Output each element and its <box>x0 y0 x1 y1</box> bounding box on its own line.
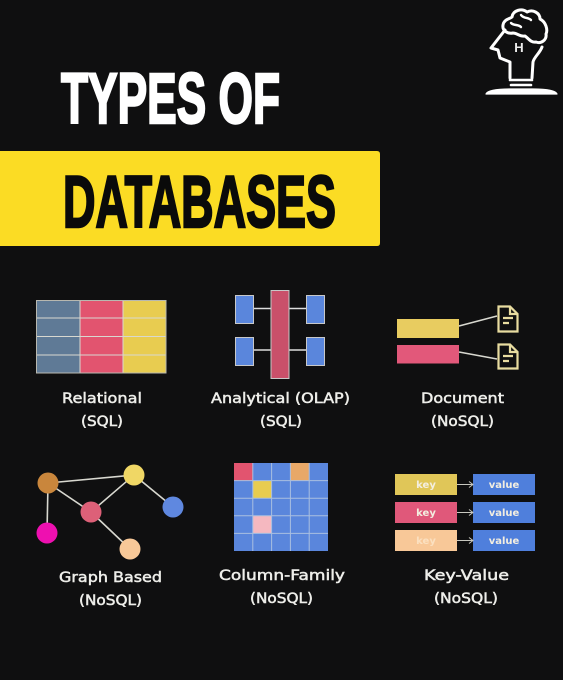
logo: brain lightbulb head <box>486 10 557 94</box>
panel: document <box>397 306 518 430</box>
label: Analytical (OLAP) (SQL): Analytical (OLAP) <box>211 391 350 407</box>
label: Analytical (OLAP) (SQL) <box>211 391 350 430</box>
yellow banner with DATABASES <box>0 151 380 246</box>
label: Graph Based (NoSQL): (NoSQL) <box>79 593 142 609</box>
label: Document (NoSQL) <box>421 391 504 430</box>
panel: key-value <box>395 474 535 607</box>
panel: analytical <box>211 290 350 430</box>
icon: key-value pairs: value <box>489 480 520 491</box>
label: Graph Based (NoSQL): Graph Based <box>59 570 162 586</box>
label: Key-Value (NoSQL) <box>424 568 509 607</box>
title: TYPES OF: TYPES OF <box>61 60 280 139</box>
label: Key-Value (NoSQL): (NoSQL) <box>434 591 498 607</box>
icon: relational table <box>36 300 166 373</box>
icon: key-value pairs: value <box>489 536 520 547</box>
label: Relational (SQL) <box>62 391 142 430</box>
label: Column-Family (NoSQL): (NoSQL) <box>250 591 313 607</box>
panel: graph based <box>36 464 184 609</box>
logo letter H: H <box>514 40 524 55</box>
icon: key-value pairs <box>395 474 535 551</box>
icon: key-value pairs: key <box>416 480 436 491</box>
label: Analytical (OLAP) (SQL): (SQL) <box>260 414 302 430</box>
icon: column-family grid <box>234 463 328 551</box>
label: Graph Based (NoSQL) <box>59 570 162 609</box>
icon: key-value pairs: key <box>416 508 436 519</box>
icon: key-value pairs: value <box>489 508 520 519</box>
heading: DATABASES: DATABASES <box>63 162 336 243</box>
label: Column-Family (NoSQL) <box>219 568 345 607</box>
panel: relational <box>36 300 166 430</box>
panel: column-family <box>219 463 345 607</box>
icon: document store <box>397 306 518 368</box>
label: Relational (SQL): Relational <box>62 391 142 407</box>
icon: analytical schema <box>236 290 324 378</box>
icon: graph network <box>36 464 184 560</box>
icon: key-value pairs: key <box>416 536 436 547</box>
label: Column-Family (NoSQL): Column-Family <box>219 568 345 584</box>
label: Document (NoSQL): (NoSQL) <box>431 414 494 430</box>
label: Document (NoSQL): Document <box>421 391 504 407</box>
label: Relational (SQL): (SQL) <box>81 414 123 430</box>
label: Key-Value (NoSQL): Key-Value <box>424 568 509 584</box>
